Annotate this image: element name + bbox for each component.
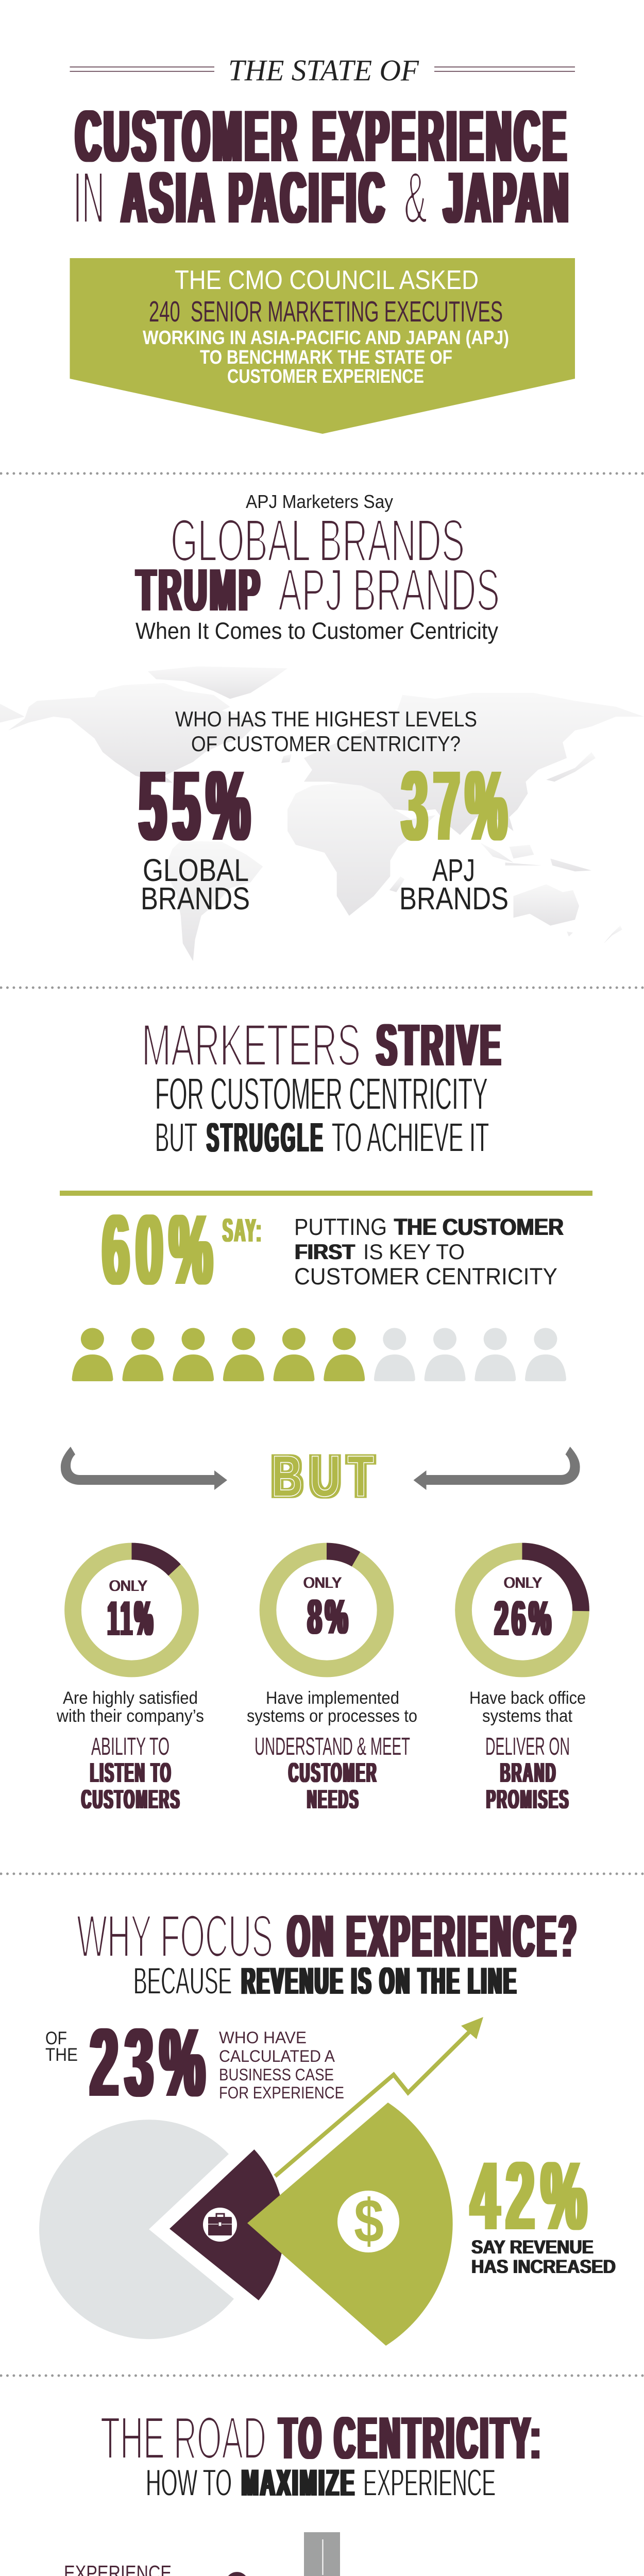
- donut: 11%: ONLY: [109, 1578, 147, 1595]
- banner: survey summary arrow: [70, 258, 575, 434]
- caption: deliver on brand promises: DELIVER ON: [485, 1733, 570, 1760]
- arrow: left curved arrow pointing right: [61, 1447, 227, 1490]
- stat: 37% APJ brands: BRANDS: [399, 881, 509, 916]
- icon: dollar: $: [354, 2187, 384, 2256]
- stat description: THE CUSTOMER: [394, 1214, 564, 1240]
- caption: listen to customers: [56, 1688, 204, 1815]
- arrow: rising revenue line: [275, 2017, 483, 2176]
- heading: STRIVE: [377, 1012, 503, 1078]
- stat: of the 23%: CALCULATED A: [219, 2047, 335, 2065]
- stat: 42% revenue increased: SAY REVENUE: [471, 2236, 594, 2258]
- stat description: [294, 1214, 564, 1290]
- sign: champion: [178, 2570, 296, 2576]
- stat: of the 23%: BUSINESS CASE: [219, 2065, 334, 2084]
- question: [175, 707, 477, 756]
- donut: 11%: 11%: [108, 1591, 156, 1646]
- caption: deliver on brand promises: BRAND: [500, 1757, 557, 1788]
- donut: 8%: 8%: [308, 1589, 351, 1645]
- heading: TO ACHIEVE IT: [332, 1114, 489, 1160]
- arrow: right curved arrow pointing left: [413, 1447, 580, 1490]
- heading: BUT: [155, 1114, 197, 1160]
- heading: [100, 2404, 543, 2504]
- title: [73, 95, 571, 238]
- caption: deliver on brand promises: systems that: [482, 1706, 572, 1726]
- heading: STRUGGLE: [207, 1114, 325, 1160]
- donut: 8%: ONLY: [303, 1574, 342, 1591]
- heading: [142, 1012, 503, 1160]
- donut: 8%: [268, 1551, 385, 1669]
- caption: listen to customers: Are highly satisfied: [63, 1688, 198, 1708]
- panel: but satisfaction rings: [56, 1444, 586, 1815]
- heading: MARKETERS: [142, 1012, 361, 1078]
- donut: 26%: 26%: [495, 1591, 554, 1646]
- banner: survey summary arrow: TO BENCHMARK THE STATE OF: [200, 347, 452, 368]
- stat: 55% global brands: GLOBAL: [143, 853, 249, 888]
- caption: understand customer needs: NEEDS: [307, 1785, 360, 1815]
- stat: 60% say: 60%: [103, 1194, 219, 1305]
- stat: 42% revenue increased: HAS INCREASED: [471, 2256, 616, 2277]
- heading: global brands trump apj brands: APJ BRANDS: [278, 556, 500, 623]
- donut: 26%: [464, 1551, 581, 1669]
- heading: WHY FOCUS: [77, 1903, 273, 1970]
- panel: global brands versus APJ brands: 55%: [139, 750, 257, 861]
- stat: 55% global brands: BRANDS: [141, 881, 250, 916]
- road: [304, 2532, 340, 2576]
- stat: 55% global brands: [139, 750, 257, 916]
- divider bar: [60, 1191, 592, 1196]
- stat: of the 23%: FOR EXPERIENCE: [219, 2083, 344, 2102]
- panel: why focus on experience: [39, 1903, 616, 2346]
- stat description: CUSTOMER CENTRICITY: [294, 1263, 557, 1290]
- decorative title rule right: [434, 67, 575, 71]
- question: OF CUSTOMER CENTRICITY?: [191, 732, 461, 756]
- panel: title header: [70, 54, 575, 434]
- icon: dollar: [337, 2187, 399, 2256]
- icon row: 6 of 10 people: [72, 1328, 566, 1381]
- caption: listen to customers: LISTEN TO: [90, 1757, 172, 1788]
- stat: 37% APJ brands: [399, 750, 513, 916]
- stat: 37% APJ brands: APJ: [432, 853, 475, 888]
- icon: briefcase: [203, 2208, 237, 2242]
- heading: global brands trump apj brands: TRUMP: [137, 556, 263, 623]
- heading: but: BUT: [272, 1444, 381, 1509]
- stat: of the 23%: OF: [45, 2028, 67, 2048]
- donut: 26%: ONLY: [504, 1574, 542, 1591]
- stat description: PUTTING: [294, 1214, 387, 1240]
- heading: global brands trump apj brands: [137, 507, 500, 623]
- donut: 11%: [73, 1551, 191, 1669]
- caption: deliver on brand promises: [469, 1688, 586, 1815]
- caption: understand customer needs: CUSTOMER: [289, 1757, 378, 1788]
- decorative title rule left: [70, 67, 214, 71]
- caption: listen to customers: CUSTOMERS: [81, 1785, 181, 1815]
- subheading: When It Comes to Customer Centricity: [135, 618, 498, 644]
- caption: understand customer needs: systems or processes to: [247, 1706, 417, 1726]
- caption: deliver on brand promises: Have back office: [469, 1688, 586, 1708]
- title: IN: [73, 157, 105, 238]
- pie chart: exploded slices: [39, 2103, 453, 2346]
- title: &: [404, 157, 427, 238]
- heading: BECAUSE: [133, 1960, 232, 2002]
- kicker: the state of: THE STATE OF: [228, 54, 419, 87]
- caption: understand customer needs: [247, 1688, 417, 1815]
- stat: of the 23%: WHO HAVE: [219, 2028, 307, 2047]
- heading: marketers say: APJ Marketers Say: [246, 491, 393, 512]
- panel: global brands versus APJ brands: 37%: [402, 750, 513, 861]
- heading: HOW TO: [146, 2462, 232, 2504]
- banner: survey summary arrow: WORKING IN ASIA-PACIFIC AND JAPAN (APJ): [143, 327, 509, 349]
- caption: listen to customers: ABILITY TO: [91, 1733, 170, 1760]
- heading: [77, 1903, 579, 2002]
- panel: marketers strive: [60, 1012, 592, 1381]
- stat description: FIRST: [295, 1240, 355, 1264]
- heading: EXPERIENCE: [363, 2462, 496, 2504]
- question: WHO HAS THE HIGHEST LEVELS: [175, 707, 477, 731]
- heading: MAXIMIZE: [242, 2462, 356, 2504]
- stat: of the 23%: 23%: [90, 2008, 212, 2116]
- world map background: [0, 666, 644, 961]
- caption: understand customer needs: UNDERSTAND & MEET: [255, 1733, 410, 1760]
- heading: THE ROAD: [100, 2404, 266, 2471]
- banner: survey summary arrow: CUSTOMER EXPERIENCE: [227, 366, 424, 387]
- stat description: IS KEY TO: [363, 1240, 465, 1264]
- panel: the road to centricity: [53, 2404, 612, 2576]
- stat: of the 23%: THE: [45, 2045, 78, 2065]
- caption: understand customer needs: Have implemented: [266, 1688, 399, 1708]
- stat: 60% say: [103, 1194, 263, 1305]
- caption: listen to customers: with their company’s: [56, 1706, 204, 1726]
- stat: 42% revenue increased: [471, 2142, 616, 2277]
- banner: survey summary arrow: THE CMO COUNCIL ASKED: [175, 265, 479, 295]
- panel: marketers strive: SAY:: [223, 1212, 263, 1249]
- panel: global brands versus APJ brands: [0, 491, 644, 961]
